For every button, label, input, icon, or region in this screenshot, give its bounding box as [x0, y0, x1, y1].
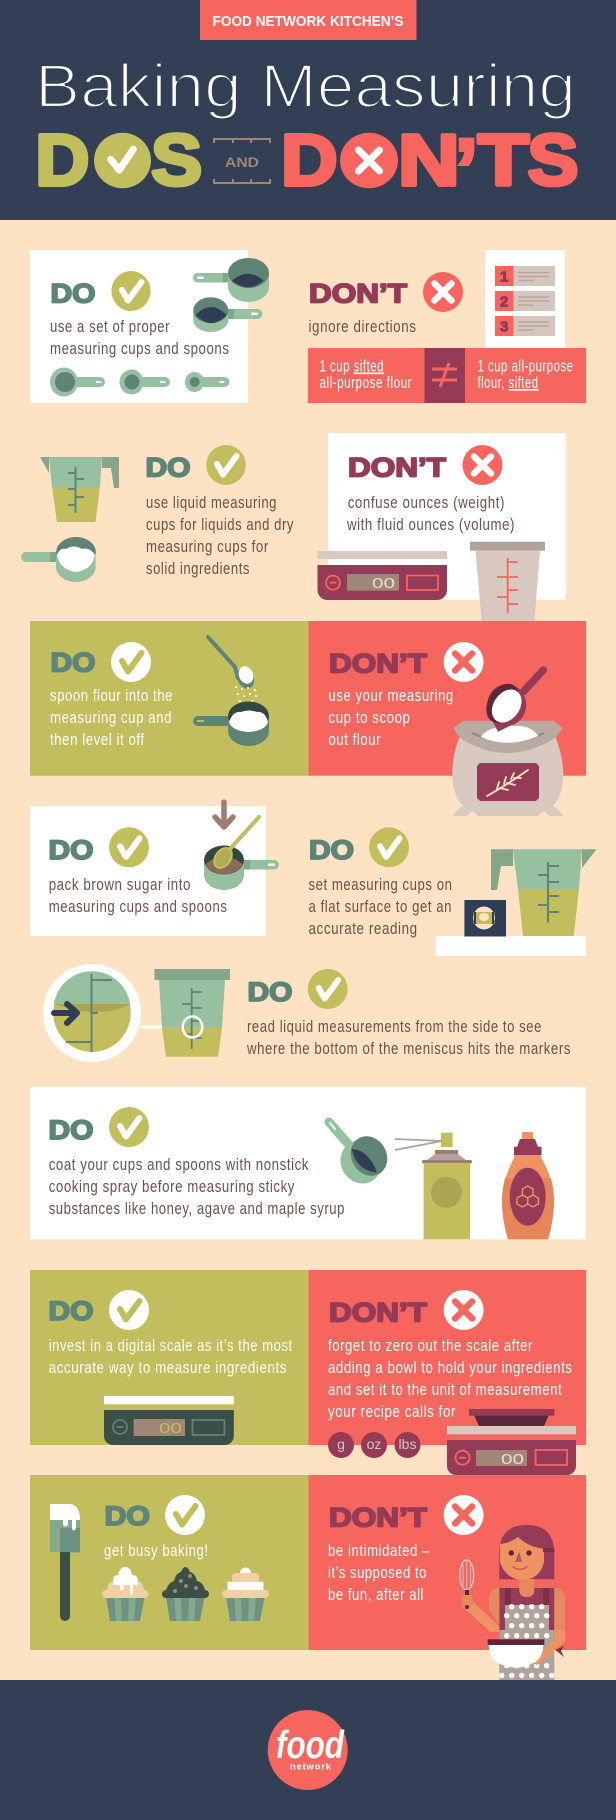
- icon: dry measuring cup with flour: [21, 537, 96, 582]
- label: DO: DO: [104, 1501, 150, 1531]
- panel: don't confuse ounces: [318, 433, 566, 621]
- icon: scale with bowl: [447, 1409, 576, 1475]
- title: Baking Measuring: Baking Measuring: [35, 52, 576, 120]
- text: confuse ounces (weight): [348, 494, 505, 512]
- text: cup to scoop: [328, 709, 410, 727]
- torso: [499, 1588, 554, 1640]
- text: forget to zero out the scale after: [328, 1337, 533, 1355]
- text: set measuring cups on: [308, 876, 452, 894]
- recipe card: 3: [500, 318, 508, 336]
- text: then level it off: [50, 731, 145, 749]
- label: DO: DO: [248, 977, 292, 1007]
- icon: cross: [444, 1290, 484, 1330]
- text: [146, 494, 294, 578]
- text: [328, 1337, 572, 1421]
- text: out flour: [328, 731, 381, 749]
- panel: do use liquid cups: [21, 445, 294, 582]
- panel: don't ignore directions: [308, 250, 586, 403]
- comparison band: 1 cup sifted: [320, 358, 384, 376]
- icon: spatula: [50, 1504, 80, 1621]
- text: [49, 1337, 293, 1377]
- icon: honey bottle: [502, 1132, 554, 1239]
- connector line: [140, 1026, 182, 1028]
- label: DO: DO: [309, 835, 354, 865]
- text: pack brown sugar into: [49, 876, 191, 894]
- arms: [489, 1588, 499, 1624]
- text: use a set of proper: [50, 318, 170, 336]
- text: accurate reading: [308, 920, 418, 938]
- text: be intimidated –: [328, 1542, 430, 1560]
- text: measuring cups and spoons: [50, 340, 230, 358]
- icon: check: [165, 1495, 205, 1535]
- text: be fun, after all: [328, 1586, 424, 1604]
- text: measuring cup and: [50, 709, 172, 727]
- label: DON'T: DON’T: [309, 278, 408, 308]
- recipe card: [485, 250, 565, 348]
- unit badges: [328, 1432, 420, 1458]
- unit badges: g: [337, 1436, 345, 1452]
- text: [328, 1542, 430, 1604]
- icon: cross: [444, 1495, 484, 1535]
- icon: beige measuring cup: [470, 542, 545, 621]
- text: cooking spray before measuring sticky: [49, 1178, 295, 1196]
- icon: liquid measuring cup: [491, 849, 596, 936]
- icon: check: [308, 969, 348, 1009]
- panel: do spoon flour: [30, 621, 308, 776]
- label: DON'T: DON’T: [329, 648, 428, 678]
- text: [308, 876, 452, 938]
- text: [50, 687, 173, 749]
- panel: don't scoop flour: [308, 621, 586, 816]
- face: [500, 1537, 544, 1580]
- shelf: [436, 936, 586, 956]
- icon: check: [109, 1107, 149, 1147]
- icon: cup with callout: [154, 969, 230, 1057]
- text: get busy baking!: [104, 1542, 209, 1560]
- text: a flat surface to get an: [308, 898, 452, 916]
- text: measuring cups and spoons: [49, 898, 228, 916]
- text: invest in a digital scale as it’s the most: [49, 1337, 293, 1355]
- icon: cupcake chocolate: [162, 1567, 209, 1621]
- icon: magnified meniscus: [43, 964, 141, 1062]
- icon: arrow down: [215, 802, 233, 827]
- icon: check: [369, 827, 409, 867]
- label: DO: DO: [146, 452, 190, 482]
- panel: do invest in digital scale: [30, 1270, 308, 1445]
- icon: cup packed with sugar: [204, 817, 279, 890]
- label: DON'T: DON’T: [329, 1502, 428, 1532]
- text: solid ingredients: [146, 560, 250, 578]
- comparison band: [308, 348, 586, 403]
- panel: do use proper cups: [30, 250, 269, 403]
- unit badges: oz: [367, 1436, 381, 1452]
- unit badges: lbs: [399, 1436, 416, 1452]
- icon: measuring cup lower: [193, 297, 262, 332]
- text: measuring cups for: [146, 538, 269, 556]
- icon: digital scale: [104, 1396, 234, 1445]
- text: [50, 318, 230, 358]
- text: [328, 687, 454, 749]
- text: coat your cups and spoons with nonstick: [49, 1156, 309, 1174]
- icon: check: [111, 271, 151, 311]
- icon: tilted measuring cup: [329, 1122, 394, 1191]
- heading: DOS: D: [35, 121, 89, 201]
- icon: cupcake layered: [222, 1568, 269, 1621]
- text: your recipe calls for: [328, 1403, 456, 1421]
- text: with fluid ounces (volume): [346, 516, 515, 534]
- ruler: AND: [214, 139, 270, 183]
- heading: DOS: [35, 121, 202, 201]
- icon: cupcake vanilla: [102, 1567, 148, 1621]
- text: [346, 494, 515, 534]
- icon: measuring cup upper: [193, 258, 269, 302]
- apron: [499, 1605, 554, 1680]
- icon: kitchen scale: 00: [372, 575, 395, 592]
- whisk: [460, 1560, 474, 1609]
- text: use liquid measuring: [146, 494, 277, 512]
- label: DON'T: DON’T: [348, 452, 447, 482]
- mixing bowl: [489, 1645, 543, 1668]
- illustration: woman baking: [460, 1525, 565, 1680]
- icon: spray can: [422, 1133, 472, 1239]
- icon: cross: [462, 445, 502, 485]
- header banner: [0, 0, 616, 221]
- icon: spoon with flour: [208, 637, 257, 691]
- heading: DOS: S: [151, 121, 202, 201]
- icon: kitchen scale: [318, 551, 447, 600]
- tab: Food Network Kitchen's: FOOD NETWORK KITCHEN’S: [212, 14, 404, 30]
- footer: [0, 1680, 616, 1820]
- icon: cross: [423, 272, 463, 312]
- panel: do get busy baking: [30, 1475, 308, 1650]
- recipe card: 2: [500, 294, 508, 310]
- text: substances like honey, agave and maple syrup: [49, 1200, 345, 1218]
- tab: Food Network Kitchen's: [200, 0, 416, 40]
- icon: check: [111, 642, 151, 682]
- logo: Food Network: [268, 1710, 348, 1790]
- icon: flour sack and scoop: [452, 670, 563, 816]
- heading: DON'TS: S: [528, 121, 578, 201]
- text: it’s supposed to: [328, 1564, 427, 1582]
- text: read liquid measurements from the side to see: [247, 1018, 542, 1036]
- text: [49, 1156, 345, 1218]
- text: [246, 1018, 571, 1058]
- text: [49, 876, 228, 916]
- icon: measuring spoons: [50, 368, 230, 396]
- panel: do coat with nonstick spray: [30, 1087, 586, 1239]
- label: DO: DO: [48, 1115, 94, 1145]
- panel: do read liquid measurements: [43, 964, 571, 1062]
- label: DON'T: DON’T: [329, 1298, 428, 1328]
- icon: check: [109, 827, 149, 867]
- heading: DON'TS: ’: [454, 121, 479, 221]
- heading: DON'TS: N: [398, 121, 460, 201]
- text: accurate way to measure ingredients: [49, 1359, 287, 1377]
- icon: cup with flour: [193, 702, 269, 746]
- comparison band: flour, sifted: [478, 374, 538, 392]
- heading: DON'TS: [281, 121, 578, 221]
- panel: do flat surface: [308, 827, 596, 956]
- comparison band: 1 cup all-purpose: [478, 358, 574, 376]
- label: DO: DO: [48, 1296, 94, 1326]
- icon: cross: [444, 642, 484, 682]
- panel: don't be intimidated: [308, 1475, 586, 1680]
- text: use your measuring: [328, 687, 454, 705]
- text: ignore directions: [308, 318, 416, 336]
- ruler: AND: AND: [225, 154, 259, 170]
- label: DO: DO: [50, 648, 96, 678]
- icon: spirit level: [464, 900, 506, 936]
- comparison band: all-purpose flour: [320, 374, 412, 392]
- text: cups for liquids and dry: [146, 516, 294, 534]
- icon: falling flour: [235, 686, 257, 709]
- heading: DON'TS: D: [281, 121, 338, 201]
- icon: liquid measuring cup: [40, 457, 119, 522]
- panel: do pack brown sugar: [30, 802, 279, 936]
- icon: spray lines: [395, 1139, 442, 1150]
- heading: DON'TS: T: [478, 121, 529, 201]
- icon: check: [109, 1290, 149, 1330]
- logo: Food Network: network: [290, 1762, 332, 1772]
- recipe card: 1: [500, 268, 508, 286]
- text: and set it to the unit of measurement: [328, 1381, 562, 1399]
- label: DO: DO: [48, 835, 94, 865]
- hair: [499, 1525, 554, 1579]
- panel: don't forget to zero: [308, 1270, 586, 1475]
- logo: Food Network: food: [276, 1724, 345, 1767]
- text: spoon flour into the: [50, 687, 173, 705]
- label: DO: DO: [50, 278, 96, 308]
- icon: scale with bowl: 00: [501, 1451, 524, 1468]
- icon: digital scale: 00: [159, 1420, 182, 1437]
- icon: check: [206, 445, 246, 485]
